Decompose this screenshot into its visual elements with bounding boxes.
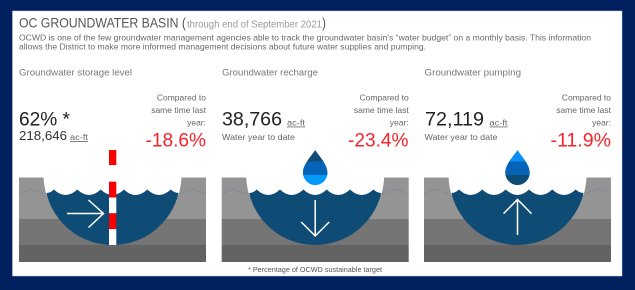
heading: storage: Groundwater storage level	[19, 68, 132, 78]
recharge volume: 38,766	[222, 110, 282, 130]
pumping volume	[425, 110, 508, 130]
panel: groundwater pumping	[424, 68, 612, 262]
storage volume: ac-ft	[70, 133, 89, 142]
comparison label: same time last	[556, 105, 612, 115]
recharge volume	[222, 110, 306, 130]
panel: groundwater recharge	[222, 68, 409, 262]
storage volume: 218,646	[19, 128, 67, 143]
comparison label: year:	[592, 118, 611, 128]
comparison value: -18.6%	[146, 131, 206, 152]
icon: water drop	[303, 150, 328, 185]
heading: pumping: Groundwater pumping	[424, 68, 521, 78]
pumping volume: 72,119	[425, 110, 484, 130]
title: through end of September 2021	[187, 18, 322, 30]
title: )	[322, 14, 326, 30]
pumping period: Water year to date	[424, 132, 498, 142]
basin illustration: storage	[19, 150, 206, 262]
storage volume	[19, 128, 89, 143]
comparison label: Compared to	[360, 92, 409, 102]
arrow: right	[67, 200, 104, 228]
intro paragraph	[19, 32, 591, 52]
panel: groundwater storage level	[19, 68, 207, 262]
comparison label: year:	[390, 118, 409, 128]
comparison label: same time last	[151, 105, 207, 115]
heading: recharge: Groundwater recharge	[222, 68, 318, 78]
comparison value: -11.9%	[550, 131, 611, 152]
arrow: down	[301, 200, 329, 236]
gauge	[109, 150, 116, 245]
comparison label	[556, 92, 612, 128]
basin illustration: recharge	[222, 150, 409, 262]
comparison value: -23.4%	[348, 131, 409, 152]
comparison label	[354, 92, 409, 128]
comparison label: year:	[187, 118, 206, 128]
pumping volume: ac-ft	[490, 118, 508, 128]
comparison label	[151, 92, 207, 128]
recharge volume: ac-ft	[287, 118, 306, 128]
intro paragraph: OCWD is one of the few groundwater management agencies able to track the groundwater basin's “water budget” on a monthly basis. This information	[19, 32, 591, 42]
arrow: up	[504, 200, 532, 235]
basin illustration: pumping	[424, 150, 611, 262]
title: OC GROUNDWATER BASIN (	[19, 14, 186, 30]
storage percentage: 62% *	[19, 110, 71, 130]
icon: water drop	[505, 150, 530, 185]
comparison label: Compared to	[562, 92, 611, 102]
intro paragraph: allows the District to make more informed management decisions about future water supplies and pumping.	[19, 42, 426, 52]
footnote: * Percentage of OCWD sustainable target	[248, 265, 383, 274]
comparison label: Compared to	[157, 92, 206, 102]
comparison label: same time last	[354, 105, 409, 115]
title	[19, 14, 326, 30]
recharge period: Water year to date	[222, 132, 295, 142]
